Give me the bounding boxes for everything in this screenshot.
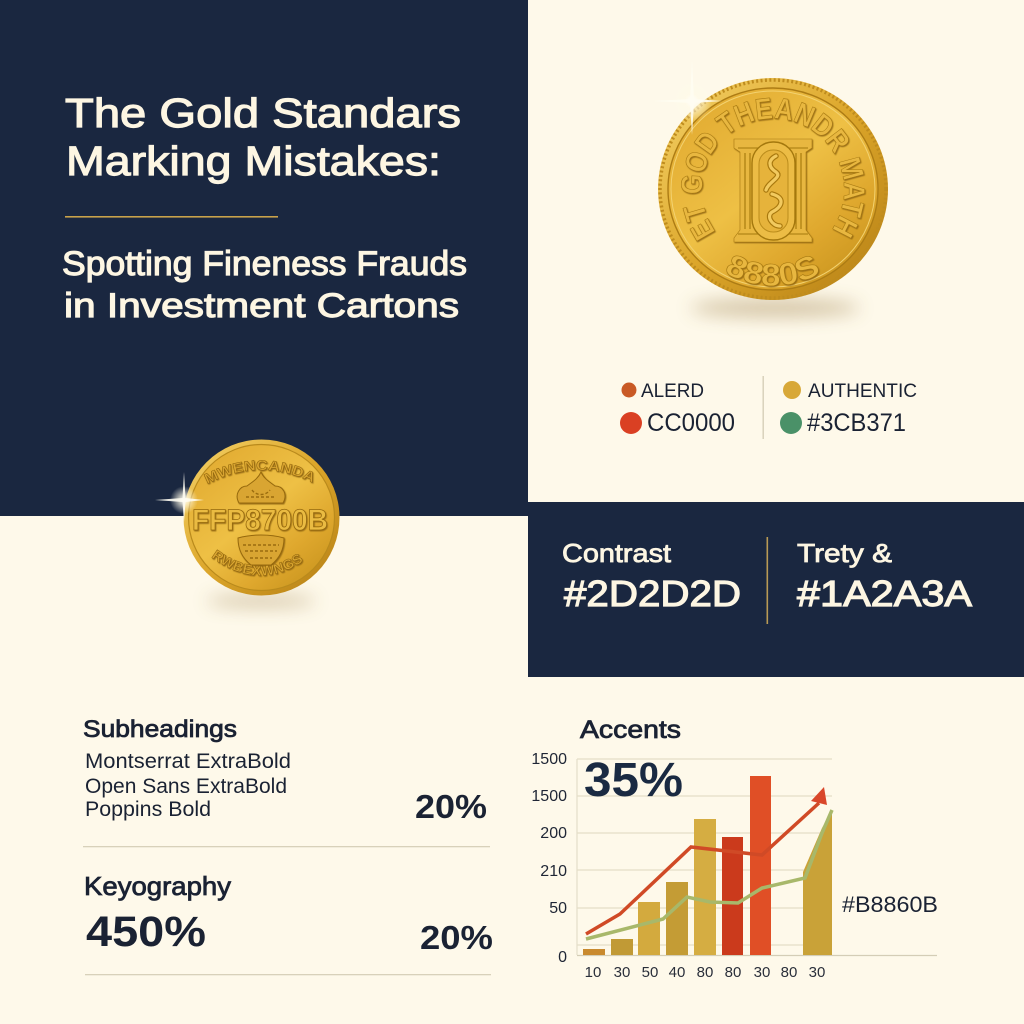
line: green trend <box>586 810 832 939</box>
y axis labels: 210 <box>540 863 567 880</box>
label: contrast <box>562 538 741 614</box>
font list: Open Sans ExtraBold <box>85 775 287 798</box>
y axis labels: 200 <box>540 825 567 842</box>
x axis labels: 40 <box>669 964 685 981</box>
icon: large gold coin: ET GOD THEANDR MATH <box>681 98 866 243</box>
heading: accents: Accents <box>580 716 681 744</box>
font list <box>85 750 291 821</box>
y axis labels: 50 <box>549 900 567 917</box>
stat: 20 percent: 20% <box>415 788 487 825</box>
icon: small gold coin: RWBEXWNGS <box>212 550 304 578</box>
x axis labels: 50 <box>642 964 658 981</box>
panel: subheadings <box>83 716 487 825</box>
y axis labels <box>531 751 567 966</box>
subtitle <box>62 245 467 325</box>
label: trety: #1A2A3A <box>797 573 972 614</box>
bar and line chart <box>531 751 938 981</box>
font list: Montserrat ExtraBold <box>85 750 291 773</box>
emblem: upper mound <box>237 472 285 503</box>
bars <box>583 776 832 955</box>
y axis labels: 0 <box>558 949 567 966</box>
legend item: alerd: ALERD <box>641 380 704 402</box>
legend: alert and authentic colours <box>620 376 917 439</box>
title divider <box>65 216 278 218</box>
legend item: 3CB371: #3CB371 <box>807 409 906 437</box>
stat: 20 percent: 20% <box>420 919 493 956</box>
label: contrast: #2D2D2D <box>564 573 741 614</box>
x axis labels: 10 <box>585 964 601 981</box>
line: red trend with arrow <box>586 787 827 934</box>
emblem: lower basket <box>238 535 284 565</box>
x axis labels <box>585 964 825 981</box>
x axis labels: 30 <box>809 964 825 981</box>
x axis labels: 30 <box>754 964 770 981</box>
icon: small gold coin: MWENCANDA <box>204 460 314 485</box>
heading: subheadings: Subheadings <box>83 716 237 743</box>
label: trety: Trety & <box>797 538 892 568</box>
x axis labels: 30 <box>614 964 630 981</box>
legend item: authentic: AUTHENTIC <box>808 380 917 402</box>
title: Marking Mistakes: <box>66 138 441 184</box>
icon: small gold coin <box>156 440 340 617</box>
label: trety <box>797 538 972 614</box>
panel: title navy block <box>0 0 528 516</box>
y axis labels: 1500 <box>531 751 567 768</box>
icon: sparkle on large coin <box>652 60 722 135</box>
label: accent hex: #B8860B <box>842 892 938 917</box>
subtitle: Spotting Fineness Frauds <box>62 245 467 283</box>
emblem: columns <box>734 139 812 242</box>
panel: keyography <box>84 871 493 956</box>
panel: contrast navy block <box>528 502 1024 677</box>
heading: keyography: Keyography <box>84 871 231 901</box>
chart grid <box>577 759 832 955</box>
stat: 35 percent: 35% <box>584 754 683 807</box>
x axis labels: 80 <box>781 964 797 981</box>
font list: Poppins Bold <box>85 798 211 821</box>
icon: large gold coin <box>658 78 888 327</box>
title <box>65 90 461 184</box>
icon: large gold coin: 8880S <box>726 256 820 288</box>
contrast swatch text <box>562 537 972 624</box>
stat: 450 percent: 450% <box>86 908 206 956</box>
icon: sparkle on small coin <box>155 472 204 522</box>
y axis labels: 1500 <box>531 788 567 805</box>
legend item: CC0000: CC0000 <box>647 409 735 437</box>
icon: small gold coin: FFP8700B <box>192 504 328 537</box>
x axis labels: 80 <box>725 964 741 981</box>
label: contrast: Contrast <box>562 538 672 568</box>
subtitle: in Investment Cartons <box>64 287 459 325</box>
title: The Gold Standars <box>65 90 461 136</box>
x axis labels: 80 <box>697 964 713 981</box>
